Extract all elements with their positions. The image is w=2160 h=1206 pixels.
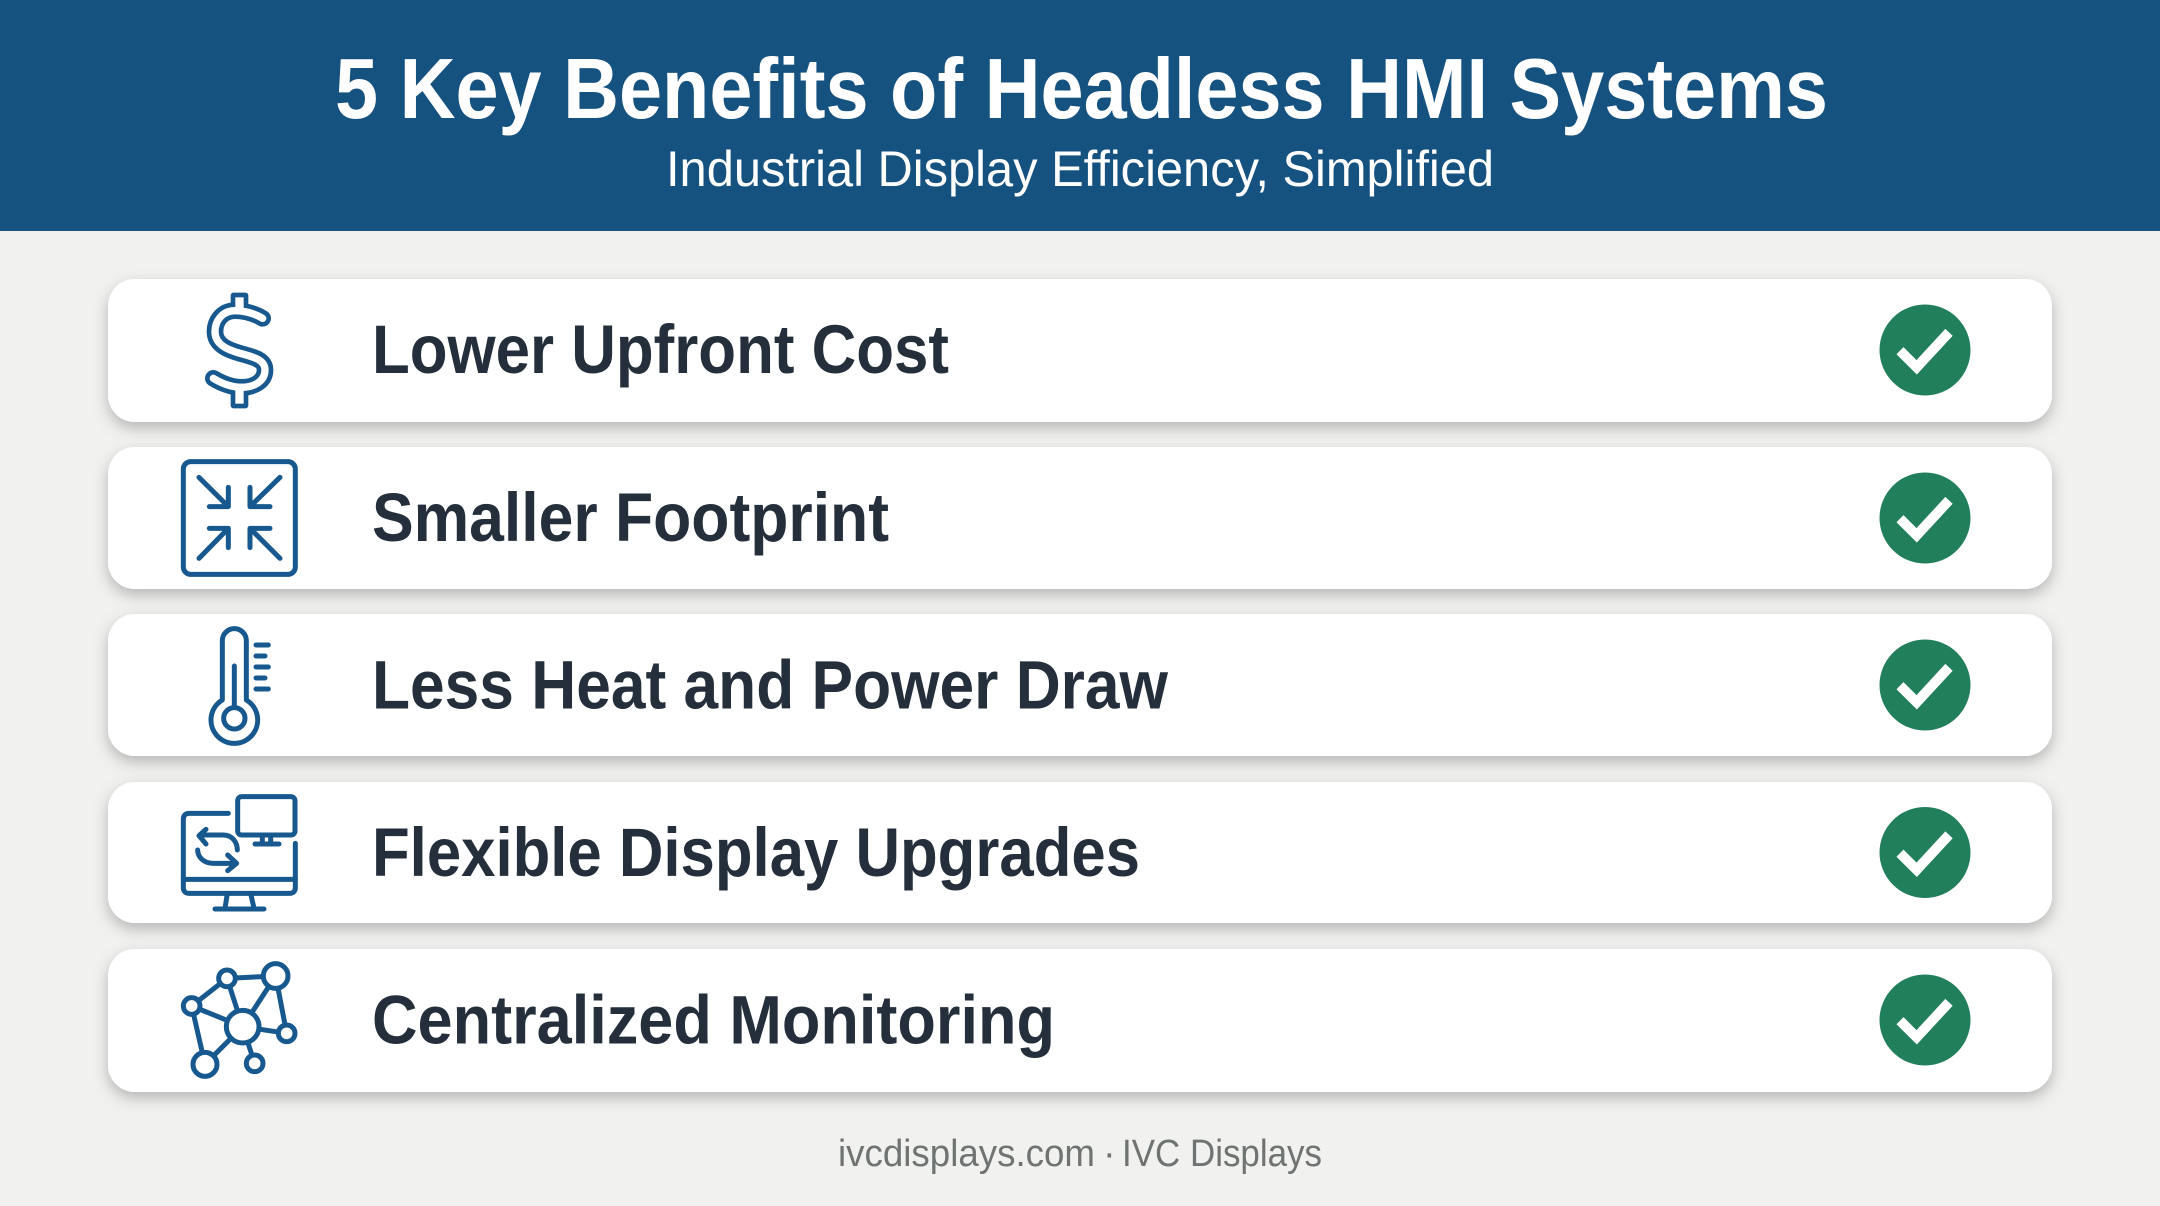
- footer credit: [838, 1133, 1322, 1175]
- icon: check mark: [1880, 807, 1970, 898]
- header banner: [0, 0, 2160, 231]
- label: Smaller Footprint: [372, 479, 889, 556]
- panel: lower upfront cost: [108, 279, 2052, 422]
- footer credit: IVC Displays: [1122, 1133, 1322, 1175]
- subtitle: Industrial Display Efficiency, Simplified: [666, 141, 1494, 197]
- icon: dollar sign: [213, 293, 265, 408]
- panel: flexible display upgrades: [108, 782, 2052, 923]
- label: Centralized Monitoring: [372, 982, 1055, 1058]
- title: 5 Key Benefits of Headless HMI Systems: [335, 42, 1828, 137]
- panel: centralized monitoring: [108, 949, 2052, 1092]
- panel: smaller footprint: [108, 447, 2052, 589]
- icon: network nodes: [183, 964, 295, 1076]
- footer credit: ·: [1103, 1133, 1116, 1175]
- icon: thermometer: [211, 629, 268, 743]
- label: Less Heat and Power Draw: [372, 646, 1168, 724]
- icon: display swap: [183, 797, 295, 909]
- footer credit: ivcdisplays.com: [838, 1133, 1095, 1175]
- icon: check mark: [1880, 974, 1970, 1066]
- icon: check mark: [1880, 304, 1970, 396]
- panel: less heat and power draw: [108, 614, 2052, 756]
- icon: compress arrows: [183, 462, 295, 574]
- label: Flexible Display Upgrades: [372, 814, 1140, 891]
- label: Lower Upfront Cost: [372, 311, 949, 388]
- icon: check mark: [1880, 472, 1970, 564]
- icon: check mark: [1880, 640, 1970, 730]
